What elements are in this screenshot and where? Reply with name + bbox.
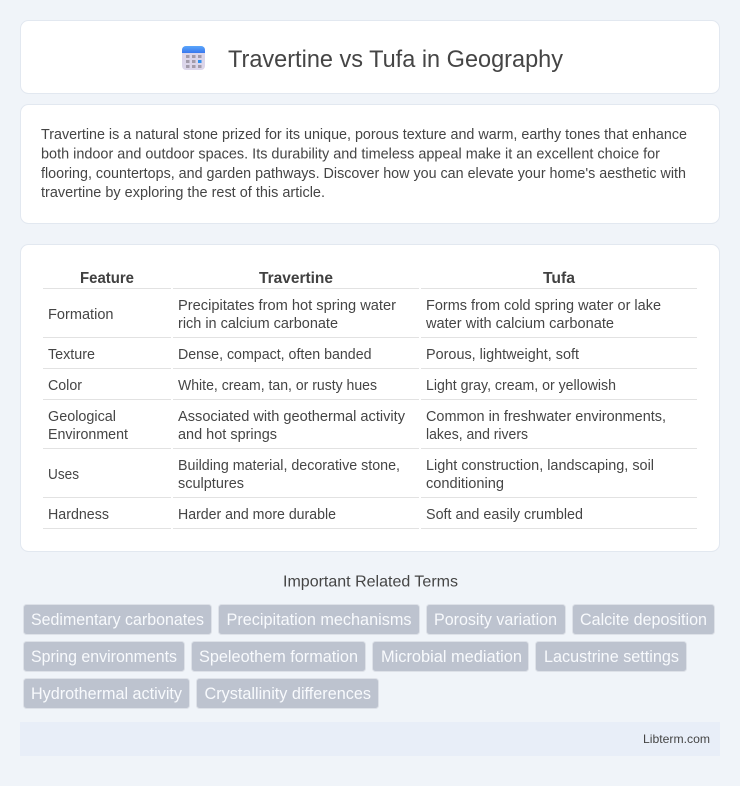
row: hardness: Hardness	[48, 507, 109, 523]
related term tags: Porosity variation	[434, 611, 557, 629]
row: texture: Dense, compact, often banded	[178, 347, 372, 363]
table header row: Feature	[80, 270, 134, 287]
heading: important related terms: Important Related Terms	[283, 574, 458, 590]
row: formation: Precipitates from hot spring water	[178, 298, 396, 314]
row: color	[48, 378, 616, 394]
related term tags	[24, 604, 714, 708]
row: uses: sculptures	[178, 476, 244, 492]
row: uses: conditioning	[426, 476, 504, 492]
table header row: Tufa	[543, 270, 575, 287]
row: texture: Texture	[48, 347, 95, 363]
row: formation: rich in calcium carbonate	[178, 316, 338, 332]
row: formation: Forms from cold spring water or lake	[426, 298, 661, 314]
panel: introduction: flooring, countertops, and garden pathways. Discover how you can elevate your home's aesthetic with	[41, 166, 686, 182]
row: geological environment: Environment	[48, 427, 128, 443]
title: Travertine vs Tufa in Geography	[228, 46, 564, 73]
related term tags: Precipitation mechanisms	[226, 611, 412, 629]
row: color: White, cream, tan, or rusty hues	[178, 378, 377, 394]
row: hardness: Soft and easily crumbled	[426, 507, 583, 523]
panel: comparison table	[20, 244, 720, 552]
row: geological environment: Common in freshwater environments,	[426, 409, 666, 425]
row: geological environment	[48, 409, 666, 443]
row: texture: Porous, lightweight, soft	[426, 347, 579, 363]
panel: introduction: both indoor and outdoor spaces. Its durability and timeless appeal make it an excellent choice for	[41, 146, 660, 162]
footer bar: Libterm.com	[643, 732, 710, 746]
panel: introduction: Travertine is a natural stone prized for its unique, porous texture and warm, earthy tones that enhance	[41, 127, 687, 143]
row: geological environment: Geological	[48, 409, 116, 425]
row: formation: water with calcium carbonate	[425, 316, 614, 332]
related term tags: Microbial mediation	[381, 648, 522, 666]
related term tags: Lacustrine settings	[544, 648, 679, 666]
row: color: Light gray, cream, or yellowish	[426, 378, 616, 394]
table header row	[80, 270, 575, 287]
row: hardness	[48, 507, 583, 523]
footer bar	[20, 722, 720, 756]
table header row: Travertine	[259, 270, 333, 287]
row: hardness: Harder and more durable	[178, 507, 336, 523]
related term tags: Speleothem formation	[199, 648, 358, 666]
row: geological environment: and hot springs	[178, 427, 277, 443]
row: geological environment: lakes, and rivers	[426, 427, 528, 443]
panel: introduction	[20, 104, 720, 224]
row: uses: Uses	[48, 467, 79, 483]
row: color: Color	[48, 378, 82, 394]
related term tags: Crystallinity differences	[204, 685, 371, 703]
row: geological environment: Associated with geothermal activity	[178, 409, 406, 425]
row: uses	[48, 458, 654, 492]
row: uses: Building material, decorative stone,	[178, 458, 400, 474]
panel: introduction: travertine by exploring the rest of this article.	[41, 185, 325, 201]
related term tags: Hydrothermal activity	[31, 685, 183, 703]
header panel	[20, 20, 720, 94]
row: texture	[48, 347, 579, 363]
related term tags: Spring environments	[31, 648, 177, 666]
related term tags: Sedimentary carbonates	[31, 611, 204, 629]
related term tags: Calcite deposition	[580, 611, 707, 629]
row: formation: Formation	[48, 307, 114, 323]
icon: calendar	[182, 46, 205, 70]
row: uses: Light construction, landscaping, soil	[426, 458, 654, 474]
row: formation	[48, 298, 661, 332]
